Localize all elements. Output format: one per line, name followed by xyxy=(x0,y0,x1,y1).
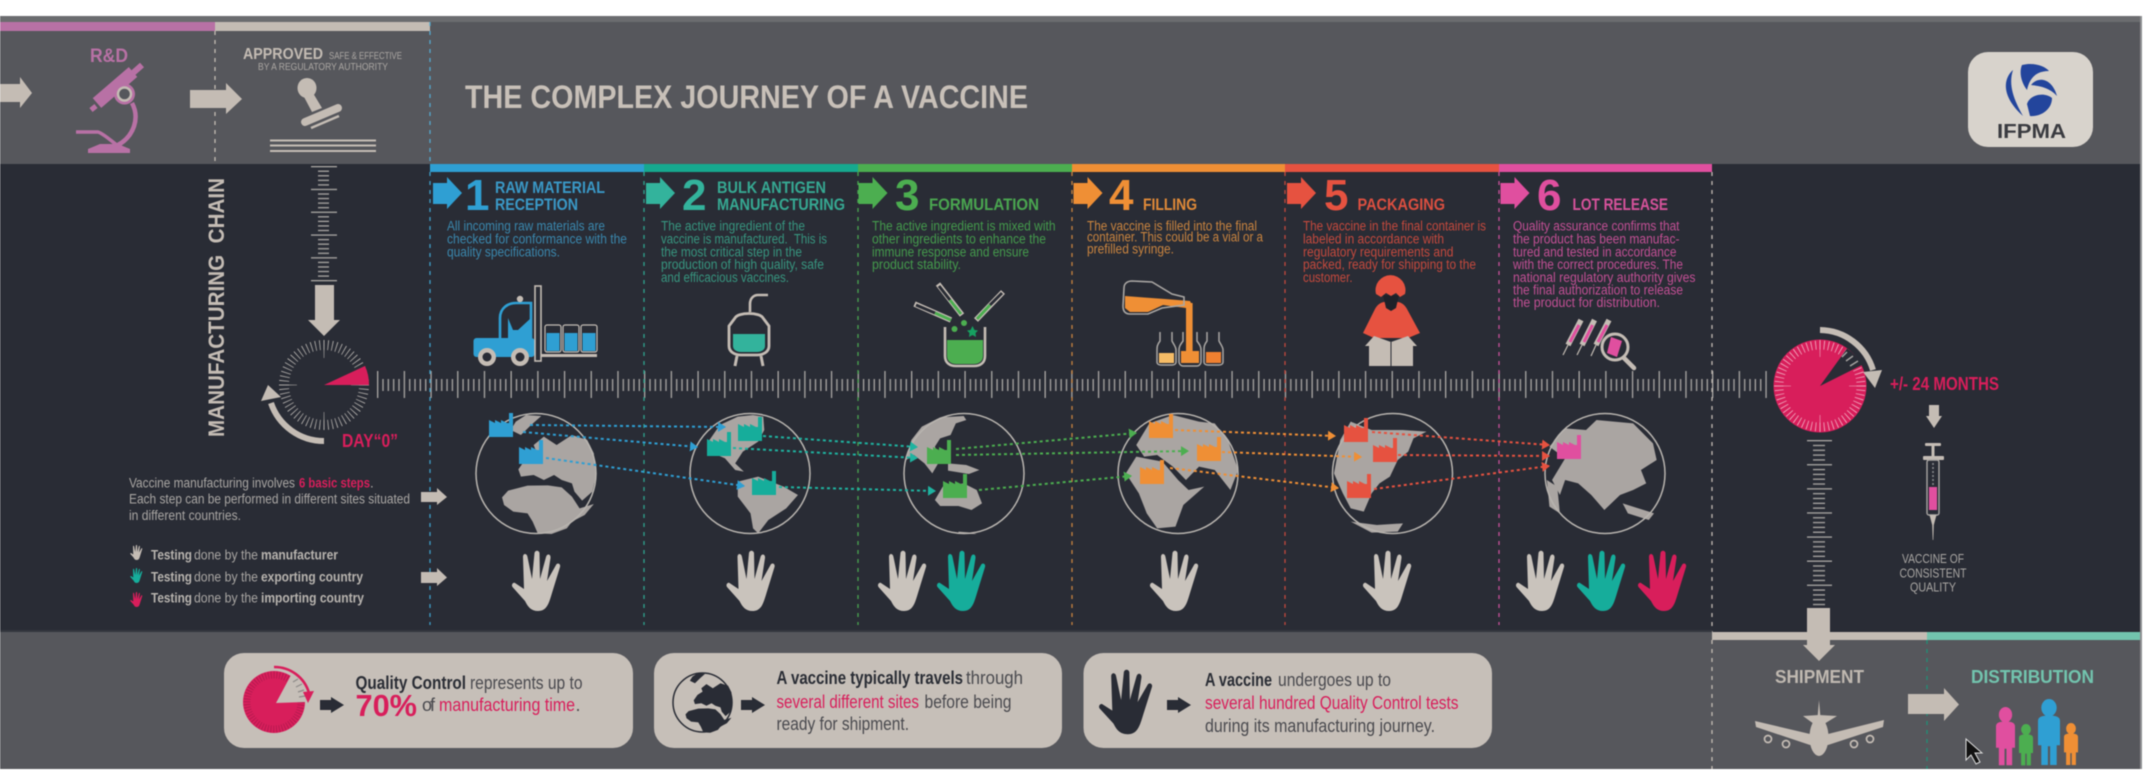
arrow: into R&D xyxy=(0,77,32,108)
arrow: down to day 0 xyxy=(308,285,340,336)
legend: testing: done by the xyxy=(194,590,258,606)
text: 70 percent of manufacturing time: 70% xyxy=(356,688,417,723)
globe 5: East Asia xyxy=(1332,414,1452,534)
legend: testing: Testing xyxy=(151,570,192,584)
icon: microscope xyxy=(76,65,142,153)
text: several different sites xyxy=(776,668,1023,734)
logo: IFPMA xyxy=(1968,52,2093,147)
step 4: filling xyxy=(1072,164,1285,625)
step 6: lot release xyxy=(1499,164,1712,625)
step 5: packaging: PACKAGING xyxy=(1358,196,1445,214)
arrow: R&D to approved xyxy=(190,83,242,114)
icon: airplane xyxy=(1755,700,1884,756)
heading: distribution: DISTRIBUTION xyxy=(1971,666,2094,687)
arrow: to syringe xyxy=(1926,405,1942,428)
text: step 3 description: The active ingredient is mixed with xyxy=(872,218,1056,234)
text: several different sites: through xyxy=(966,668,1023,688)
legend: testing: done by the xyxy=(194,548,258,562)
heading: approved xyxy=(243,46,402,73)
legend: testing: importing country xyxy=(261,590,364,606)
icon: syringe xyxy=(1923,443,1944,540)
text: step 6 description: the product has been manufac- xyxy=(1513,232,1680,246)
text: 70 percent of manufacturing time: represents up to xyxy=(470,673,582,693)
hands: testing per step xyxy=(512,551,1686,611)
icon: pink clock xyxy=(243,667,314,733)
heading: approved: BY A REGULATORY AUTHORITY xyxy=(258,62,388,73)
text: step 5 description: The vaccine in the final container is xyxy=(1303,218,1486,234)
step 1: raw material reception: RAW MATERIAL xyxy=(495,179,605,197)
icon: person packing a box xyxy=(1363,275,1420,366)
step 1: raw material reception xyxy=(430,164,644,625)
label: plus or minus 24 months: +/- 24 MONTHS xyxy=(1890,374,1999,394)
clock: day 0 xyxy=(261,345,369,441)
text: several different sites: several different sites xyxy=(776,692,919,712)
text: step 2 description: the most critical step in the xyxy=(661,244,802,260)
step 3: formulation xyxy=(858,164,1072,625)
logo: IFPMA: IFPMA xyxy=(1997,121,2066,143)
text: step 2 description: The active ingredient of the xyxy=(661,218,805,234)
step 1: raw material reception: 1 xyxy=(465,171,489,220)
text: vaccine of consistent quality: CONSISTENT xyxy=(1900,566,1967,580)
icon: dark hand xyxy=(1099,670,1152,734)
step 5: packaging: 5 xyxy=(1324,171,1348,220)
icon: syringes under magnifier xyxy=(1563,320,1634,368)
step 4: filling: 4 xyxy=(1109,171,1134,220)
text: step 6 description: with the correct procedures. The xyxy=(1512,257,1683,272)
legend: testing: done by the xyxy=(194,570,258,584)
step 1: raw material reception: RECEPTION xyxy=(495,196,578,214)
text: step 3 description: product stability. xyxy=(872,257,961,272)
title: THE COMPLEX JOURNEY OF A VACCINE xyxy=(465,79,1028,115)
text: intro to steps: in different countries. xyxy=(129,508,241,523)
heading: manufacturing chain: MANUFACTURING CHAIN xyxy=(204,178,229,437)
icon: family xyxy=(1996,699,2078,765)
text: step 3 description: other ingredients to enhance the xyxy=(872,232,1046,246)
text: vaccine of consistent quality: VACCINE OF xyxy=(1902,551,1964,566)
text: step 1 description: quality specifications. xyxy=(447,244,560,260)
step 3: formulation: 3 xyxy=(895,171,919,220)
text: vaccine of consistent quality: QUALITY xyxy=(1910,580,1956,594)
text: vaccine of consistent quality xyxy=(1900,551,1967,594)
ruler: vertical to shipment xyxy=(1807,440,1832,606)
text: step 1 description xyxy=(447,218,627,260)
text: step 2 description: and efficacious vaccines. xyxy=(661,270,789,285)
text: step 3 description: immune response and ensure xyxy=(872,244,1029,260)
ruler: vertical from approval xyxy=(311,166,337,282)
bar: approved xyxy=(215,22,430,31)
heading: approved: SAFE & EFFECTIVE xyxy=(329,51,402,62)
text: several hundred tests: undergoes up to xyxy=(1278,670,1391,690)
label: day 0: DAY“0” xyxy=(342,431,398,451)
step 4: filling: FILLING xyxy=(1143,196,1197,214)
globe 2: Americas xyxy=(690,414,810,534)
text: step 4 description: prefilled syringe. xyxy=(1087,242,1174,256)
text: step 6 description: Quality assurance confirms that xyxy=(1513,218,1680,234)
icon: dark globe xyxy=(673,673,732,733)
card: vaccine travels xyxy=(654,653,1062,748)
ruler: timeline xyxy=(377,371,1767,398)
text: several hundred tests: during its manufacturing journey. xyxy=(1205,716,1435,736)
bar: distribution xyxy=(1927,632,2140,640)
text: step 2 description xyxy=(661,218,827,285)
text: step 1 description: All incoming raw materials are xyxy=(447,218,605,234)
text: step 4 description: container. This could be a vial or a xyxy=(1087,230,1263,244)
text: intro to steps: Each step can be performed in different sites situated xyxy=(129,492,410,506)
text: step 6 description: national regulatory authority gives xyxy=(1513,270,1696,285)
factories: manufacturing sites xyxy=(489,413,1581,498)
text: step 5 description: packed, ready for shipping to the xyxy=(1303,257,1476,272)
legend: testing: exporting country xyxy=(261,570,363,584)
text: several different sites: A vaccine typically travels xyxy=(776,668,963,688)
text: step 2 description: production of high quality, safe xyxy=(661,257,824,272)
text: step 5 description xyxy=(1303,218,1486,285)
arrow: to hands row xyxy=(421,568,447,586)
step 3: formulation: FORMULATION xyxy=(929,196,1039,214)
card: quality control 70 percent xyxy=(224,653,633,748)
text: step 5 description: regulatory requirements and xyxy=(1303,244,1454,260)
step 6: lot release: 6 xyxy=(1537,171,1561,220)
globe 1: Europe and Africa xyxy=(476,414,596,534)
arrow xyxy=(320,697,344,713)
text: step 6 description: the final authorization to release xyxy=(1513,282,1683,298)
legend: testing: Testing xyxy=(151,548,192,562)
text: step 4 description: The vaccine is filled into the final xyxy=(1087,218,1257,234)
arrow: down to shipment xyxy=(1803,608,1835,661)
text: step 4 description xyxy=(1087,218,1263,256)
panel: bottom band xyxy=(0,608,2140,769)
bar: R&D xyxy=(0,22,215,31)
clock: shelf end, plus or minus 24 months xyxy=(1774,330,1882,432)
heading: approved: APPROVED xyxy=(243,46,323,63)
icon: forklift xyxy=(474,286,597,366)
text: step 2 description: vaccine is manufactured. This is xyxy=(661,232,827,246)
text: several hundred tests xyxy=(1205,670,1458,736)
globe 6: Asia xyxy=(1545,414,1665,534)
step 2: bulk antigen manufacturing: 2 xyxy=(682,171,706,220)
text: 70 percent of manufacturing time xyxy=(356,673,582,723)
arrow xyxy=(741,697,765,713)
text: 70 percent of manufacturing time: manufacturing time xyxy=(439,695,575,715)
icon: stamp xyxy=(270,78,376,152)
text: step 6 description: tured and tested in accordance xyxy=(1513,244,1676,260)
text: step 6 description xyxy=(1512,218,1696,310)
step 2: bulk antigen manufacturing xyxy=(644,164,858,625)
legend: testing: manufacturer xyxy=(261,548,339,562)
panel: header band xyxy=(0,16,2140,164)
text: several different sites: before being xyxy=(924,692,1012,712)
icon: pouring into vials xyxy=(1123,281,1223,366)
text: several hundred tests: A vaccine xyxy=(1205,670,1272,690)
globe 4: Africa and Middle East xyxy=(1118,414,1238,534)
card: quality control tests xyxy=(1084,653,1492,748)
text: 70 percent of manufacturing time: Quality Control xyxy=(356,673,466,693)
text: several hundred tests: several hundred Quality Control tests xyxy=(1205,693,1458,713)
step 6: lot release: LOT RELEASE xyxy=(1572,196,1668,214)
text: 70 percent of manufacturing time: of xyxy=(422,695,436,715)
text: intro to steps: 6 basic steps xyxy=(299,476,370,490)
legend: testing xyxy=(130,545,364,607)
text: several different sites: ready for shipment. xyxy=(776,714,909,734)
legend: testing: Testing xyxy=(151,590,192,606)
text: intro to steps: Vaccine manufacturing involves xyxy=(129,476,295,490)
arrow: to globes row xyxy=(421,488,447,505)
bar: shipment xyxy=(1712,632,1927,640)
text: intro to steps: . xyxy=(370,476,374,490)
text: intro to steps xyxy=(129,476,410,523)
arrow: shipment to distribution xyxy=(1908,688,1959,721)
text: step 3 description xyxy=(872,218,1056,272)
heading: R&D: R&D xyxy=(90,46,128,67)
text: step 6 description: the product for distribution. xyxy=(1513,295,1660,310)
text: step 5 description: labeled in accordance with xyxy=(1303,232,1444,246)
icon: mouse cursor xyxy=(1966,739,1982,764)
dotted routes between sites xyxy=(523,425,1549,491)
step 5: packaging xyxy=(1285,164,1499,625)
icon: bioreactor tank xyxy=(729,295,769,366)
step 2: bulk antigen manufacturing: MANUFACTURING xyxy=(717,196,845,214)
arrow xyxy=(1167,697,1191,713)
icon: beaker and test tubes xyxy=(914,284,1003,366)
text: 70 percent of manufacturing time: . xyxy=(576,695,581,715)
text: step 5 description: customer. xyxy=(1303,270,1352,285)
text: step 1 description: checked for conformance with the xyxy=(447,232,627,246)
globe 3: Asia Pacific xyxy=(904,414,1024,534)
step 2: bulk antigen manufacturing: BULK ANTIGEN xyxy=(717,179,826,197)
heading: shipment: SHIPMENT xyxy=(1775,666,1865,687)
